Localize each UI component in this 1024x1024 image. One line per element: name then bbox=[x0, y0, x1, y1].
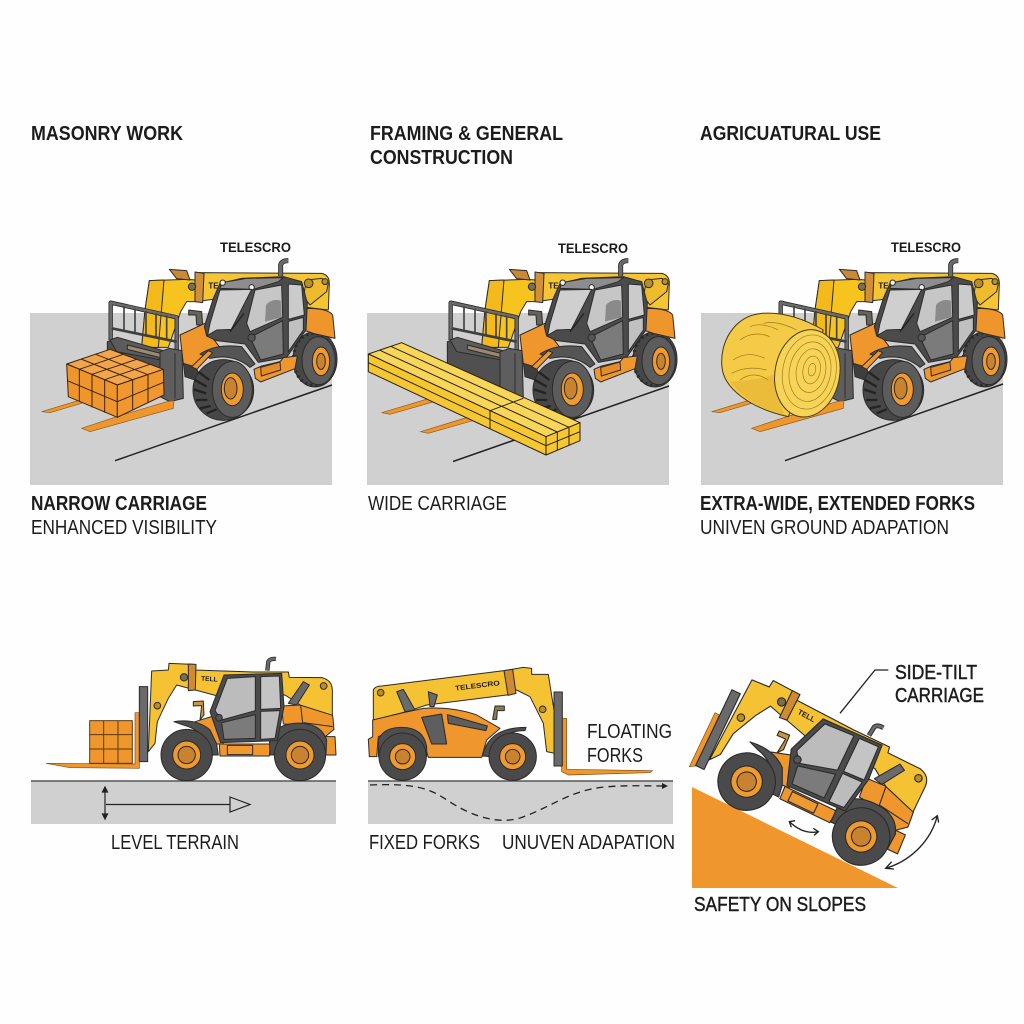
label: side-tilt carriage: CARRIAGE bbox=[895, 685, 984, 707]
caption: uneven ground adaptation: UNIVEN GROUND ADAPATION bbox=[700, 517, 949, 539]
ground line bbox=[785, 384, 1003, 461]
brick stack bbox=[67, 349, 164, 417]
callout line bbox=[840, 670, 888, 713]
orange slope bbox=[692, 787, 898, 888]
tilt arrows bbox=[789, 816, 939, 869]
heading: framing and general construction: FRAMING & GENERAL bbox=[370, 123, 563, 145]
caption: wide carriage: WIDE CARRIAGE bbox=[368, 493, 507, 515]
lumber stack bbox=[368, 343, 580, 455]
telehandler on slope bbox=[686, 662, 944, 880]
boom label: TELESCRO bbox=[455, 680, 501, 693]
panel: safety on slopes bbox=[686, 662, 984, 916]
hay bale bbox=[722, 313, 847, 422]
telehandler with lumber load bbox=[368, 261, 677, 455]
fork bbox=[46, 713, 139, 768]
heading: framing and general construction bbox=[370, 123, 563, 169]
label: floating forks: FLOATING bbox=[587, 721, 672, 743]
body bbox=[368, 708, 500, 757]
telehandler with hay bale bbox=[712, 261, 1007, 432]
direction and height arrows bbox=[102, 787, 250, 819]
forks bbox=[382, 398, 480, 433]
ground line bbox=[31, 780, 336, 782]
heading: agricultural use: AGRICUATURAL USE bbox=[700, 123, 881, 145]
panel: fixed vs floating forks bbox=[368, 667, 675, 854]
forks bbox=[712, 400, 844, 432]
panel: agricultural use bbox=[700, 123, 1007, 539]
brick load bbox=[90, 721, 132, 763]
label: floating forks bbox=[587, 721, 672, 767]
fork bbox=[562, 718, 653, 775]
caption: level terrain: LEVEL TERRAIN bbox=[111, 832, 239, 854]
label: side-tilt carriage: SIDE-TILT bbox=[895, 662, 977, 684]
label: side-tilt carriage bbox=[895, 662, 984, 707]
caption: fixed forks: FIXED FORKS bbox=[369, 832, 480, 854]
ground line bbox=[368, 780, 673, 782]
panel: masonry work bbox=[30, 123, 337, 539]
uneven path dashed line bbox=[370, 785, 665, 820]
telehandler side view with load bbox=[46, 659, 336, 781]
heading: framing and general construction: CONSTRUCTION bbox=[370, 147, 513, 169]
boom bbox=[373, 667, 555, 753]
caption: extra-wide extended forks: EXTRA-WIDE, EXTENDED FORKS bbox=[700, 493, 975, 515]
brand label: TELESCRO bbox=[891, 240, 961, 255]
brand label: TELESCRO bbox=[220, 240, 291, 255]
tilted fork bbox=[689, 713, 719, 767]
arrowhead bbox=[662, 783, 668, 789]
ground panel bbox=[701, 313, 1003, 485]
ground panel bbox=[30, 313, 332, 485]
label: floating forks: FORKS bbox=[587, 745, 643, 767]
ground strip bbox=[368, 781, 673, 824]
ground panel bbox=[367, 313, 669, 485]
telehandler with brick load bbox=[42, 261, 337, 432]
heading: masonry work: MASONRY WORK bbox=[31, 123, 183, 145]
panel: level terrain bbox=[31, 659, 336, 854]
brand label: TELESCRO bbox=[558, 241, 628, 256]
caption: narrow carriage: NARROW CARRIAGE bbox=[31, 493, 207, 515]
ground strip bbox=[31, 781, 336, 824]
caption: safety on slopes: SAFETY ON SLOPES bbox=[694, 894, 866, 916]
forks bbox=[42, 400, 174, 432]
ground line bbox=[453, 386, 669, 462]
panel: framing and general construction bbox=[367, 123, 677, 515]
caption: uneven adaptation: UNUVEN ADAPATION bbox=[502, 832, 675, 854]
ground line bbox=[115, 385, 332, 461]
telehandler side view with floating forks bbox=[368, 667, 653, 780]
caption: enhanced visibility: ENHANCED VISIBILITY bbox=[31, 517, 217, 539]
